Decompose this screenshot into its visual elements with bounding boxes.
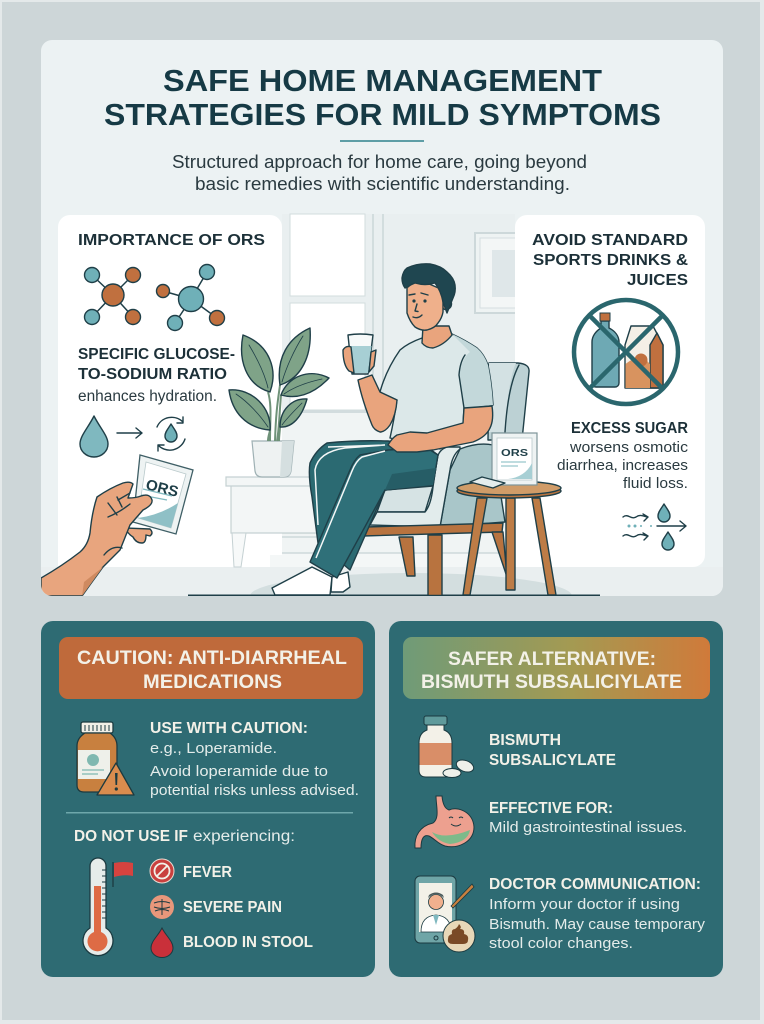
- text: doctor communication: [489, 876, 706, 952]
- text: do not use if: [74, 828, 295, 845]
- icon: doctor phone and stool: [415, 876, 475, 952]
- illustration: hand holding ORS sachet: [41, 455, 193, 596]
- icon: thermometer with flag: [83, 858, 133, 956]
- banner: safer alternative heading: [403, 637, 710, 699]
- card: avoid sports drinks: [515, 215, 705, 567]
- text: use with caution: Avoid loperamide due to: [150, 763, 328, 780]
- icon: happy stomach: [415, 796, 474, 848]
- heading: importance of ORS: IMPORTANCE OF ORS: [78, 232, 265, 249]
- text: doctor communication: Inform your doctor if using: [489, 896, 680, 913]
- illustration: seated man: [272, 264, 493, 595]
- text: effective for: EFFECTIVE FOR:: [489, 800, 613, 817]
- subtitle: [172, 152, 587, 194]
- card: importance of ORS: [58, 215, 282, 567]
- illustration: plant on side table: [226, 328, 329, 567]
- text: doctor communication: Bismuth. May cause temporary: [489, 916, 706, 933]
- text: effective for: Mild gastrointestinal issues.: [489, 819, 687, 836]
- text: bismuth subsalicylate: [489, 732, 616, 769]
- icon: medicine bottle with warning: [77, 722, 134, 795]
- heading: avoid sports drinks: AVOID STANDARD: [532, 232, 688, 249]
- text: use with caution: USE WITH CAUTION:: [150, 720, 308, 737]
- icon: molecules: [84, 264, 224, 330]
- title: STRATEGIES FOR MILD SYMPTOMS: [104, 97, 661, 132]
- item: fever: [150, 859, 232, 883]
- panel: caution anti-diarrheal medications: [41, 621, 375, 977]
- icon: bismuth bottle and tablets: [419, 716, 475, 778]
- text: use with caution: e.g., Loperamide.: [150, 740, 277, 757]
- icon: no sports drinks: [574, 300, 678, 404]
- man: head: [402, 264, 455, 348]
- text: effective for: [489, 800, 687, 836]
- man: t-shirt: [380, 334, 493, 449]
- heading: avoid sports drinks: SPORTS DRINKS &: [533, 252, 688, 269]
- item: blood in stool: [151, 928, 313, 958]
- icon: fluid loss: [623, 504, 686, 550]
- illustration: hand holding ORS sachet: ORS: [144, 476, 180, 501]
- text: doctor communication: DOCTOR COMMUNICATION:: [489, 876, 701, 893]
- text: excess sugar: [557, 420, 689, 492]
- panel: safer alternative bismuth: [389, 621, 723, 977]
- banner: safer alternative heading: BISMUTH SUBSALICIYLATE: [421, 672, 682, 693]
- item: fever: FEVER: [183, 864, 232, 881]
- item: severe pain: [150, 895, 282, 919]
- text: excess sugar: EXCESS SUGAR: [571, 420, 688, 437]
- text: excess sugar: fluid loss.: [623, 475, 688, 492]
- title: SAFE HOME MANAGEMENT: [163, 63, 602, 98]
- man: glass and hand: [343, 334, 376, 374]
- text: glucose ratio: [78, 346, 235, 405]
- text: use with caution: [150, 720, 359, 799]
- man: raised arm: [358, 375, 397, 432]
- heading: avoid sports drinks: [532, 234, 688, 285]
- banner: caution heading: CAUTION: ANTI-DIARRHEAL: [77, 648, 347, 669]
- text: glucose ratio: TO-SODIUM RATIO: [78, 366, 227, 383]
- icon: drop to absorption: [80, 416, 185, 457]
- text: excess sugar: worsens osmotic: [569, 439, 689, 456]
- subtitle: basic remedies with scientific understanding.: [195, 174, 570, 194]
- room background: [188, 214, 600, 596]
- text: bismuth subsalicylate: BISMUTH: [489, 732, 561, 749]
- illustration: armchair: [363, 363, 529, 596]
- item: blood in stool: BLOOD IN STOOL: [183, 934, 313, 951]
- man: resting arm and hand: [388, 406, 493, 452]
- text: do not use if: DO NOT USE IF: [74, 828, 188, 845]
- banner: safer alternative heading: SAFER ALTERNATIVE:: [448, 649, 656, 670]
- banner: caution heading: [59, 637, 363, 699]
- banner: caution heading: MEDICATIONS: [143, 672, 282, 693]
- heading: avoid sports drinks: JUICES: [627, 272, 688, 289]
- item: severe pain: SEVERE PAIN: [183, 899, 282, 916]
- text: glucose ratio: enhances hydration.: [78, 388, 217, 405]
- man: legs and socks: [272, 441, 438, 595]
- title: [104, 70, 660, 126]
- text: do not use if: experiencing:: [193, 828, 295, 845]
- illustration: ORS sachet on round table: ORS: [501, 448, 528, 459]
- illustration: ORS sachet on round table: [457, 433, 561, 595]
- text: glucose ratio: SPECIFIC GLUCOSE-: [78, 346, 235, 363]
- text: excess sugar: diarrhea, increases: [557, 457, 688, 474]
- text: bismuth subsalicylate: SUBSALICYLATE: [489, 752, 616, 769]
- panel: home care scene: [41, 40, 723, 619]
- text: doctor communication: stool color changes.: [489, 935, 633, 952]
- text: use with caution: potential risks unless advised.: [150, 782, 359, 799]
- subtitle: Structured approach for home care, going beyond: [172, 152, 587, 172]
